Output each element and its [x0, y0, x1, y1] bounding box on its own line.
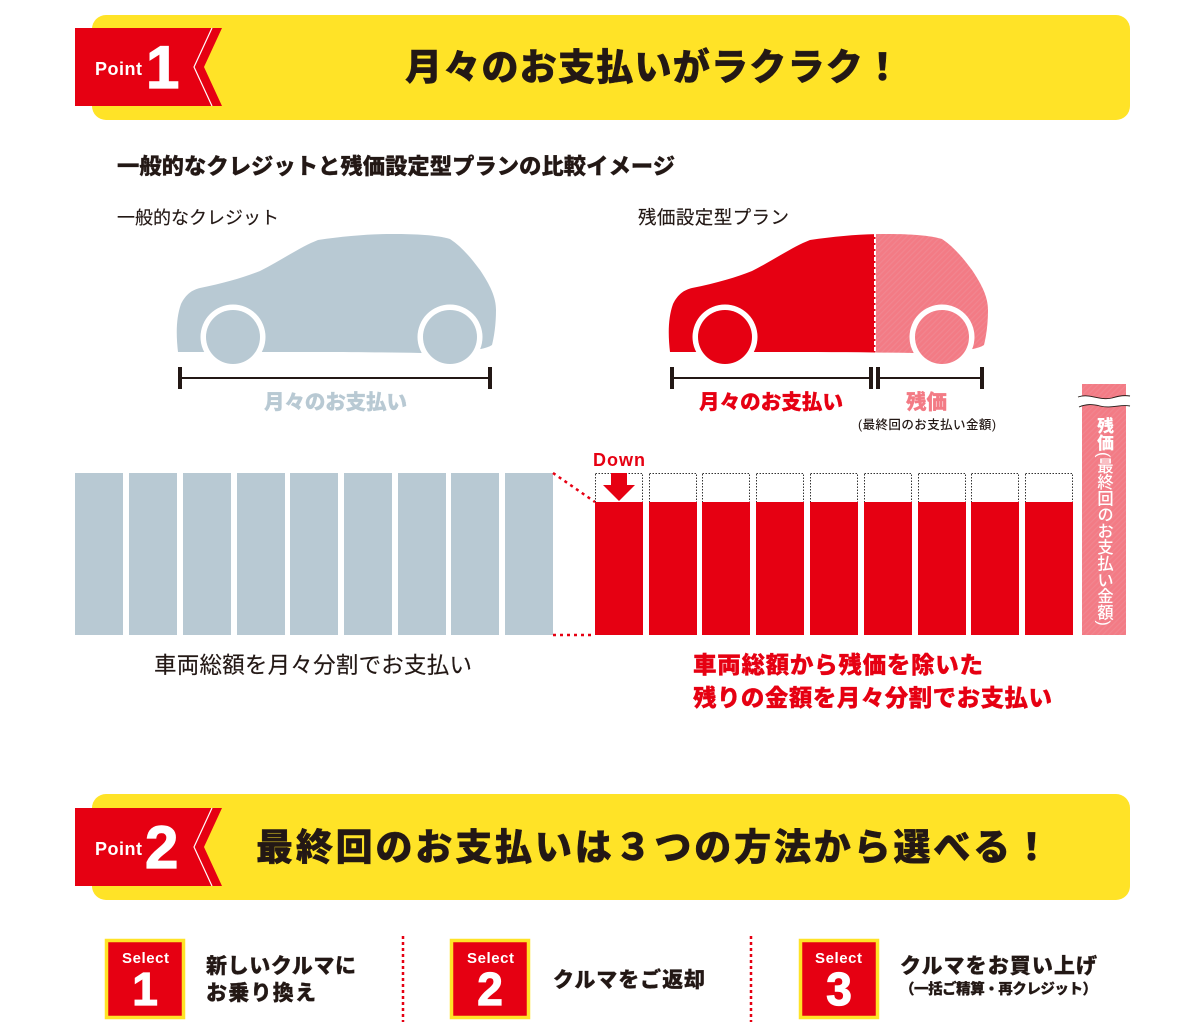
- badge: select 1: 1: [132, 963, 158, 1015]
- car: residual value plan: [669, 233, 988, 370]
- text: option 3: クルマをお買い上げ: [900, 955, 1097, 978]
- text: option 2: クルマをご返却: [553, 968, 705, 992]
- comparison heading: 一般的なクレジットと残価設定型プランの比較イメージ: [117, 153, 675, 179]
- ribbon: point 2: [75, 808, 222, 886]
- label: residual value: 残価: [906, 390, 947, 414]
- label: monthly payment red: 月々のお支払い: [699, 391, 843, 414]
- badge: select 3: [800, 940, 878, 1018]
- badge: select 3: Select: [815, 950, 862, 967]
- divider 1: [402, 936, 404, 1022]
- section: point 1 banner: [75, 15, 1130, 120]
- yellow banner 2: [92, 794, 1130, 900]
- label: down: Down: [593, 450, 645, 470]
- option 1: [106, 940, 356, 1018]
- caption: residual value plan: 残りの金額を月々分割でお支払い: [693, 684, 1052, 711]
- ribbon: point 1: [75, 28, 222, 106]
- caption: general credit: 車両総額を月々分割でお支払い: [154, 653, 472, 678]
- label: general credit: 一般的なクレジット: [117, 208, 279, 228]
- title 2: 最終回のお支払いは３つの方法から選べる！: [256, 827, 1050, 868]
- ribbon: point 1: 1: [146, 34, 179, 101]
- ribbon: point 2: 2: [145, 814, 178, 881]
- badge: select 2: 2: [477, 963, 503, 1015]
- badge: select 1: Select: [122, 950, 169, 967]
- label: monthly payment grey: 月々のお支払い: [264, 391, 407, 414]
- divider 2: [750, 936, 752, 1022]
- text: option 1: 新しいクルマに: [206, 955, 356, 978]
- section: point 2 banner: [75, 794, 1130, 900]
- option 2: [452, 940, 705, 1018]
- badge: select 3: 3: [826, 963, 852, 1015]
- text: option 3: [900, 955, 1097, 998]
- residual column: (最終回のお支払い金額): [1094, 452, 1114, 626]
- arrow: down: [603, 473, 635, 501]
- badge: select 2: [452, 940, 528, 1018]
- text: option 1: お乗り換え: [206, 982, 316, 1005]
- caption: residual value plan: [693, 651, 1052, 711]
- bars: general credit: [75, 473, 553, 635]
- ribbon: point 1: Point: [95, 59, 142, 79]
- title 1: 月々のお支払いがラクラク！: [405, 46, 901, 88]
- ribbon: point 2: Point: [95, 839, 142, 859]
- caption: residual value plan: 車両総額から残価を除いた: [693, 651, 983, 678]
- car: general credit: [177, 234, 496, 370]
- yellow banner 1: [92, 15, 1130, 120]
- badge: select 1: [106, 940, 184, 1018]
- bars: residual value plan: [595, 474, 1073, 635]
- label: final payment note: (最終回のお支払い金額): [858, 417, 996, 432]
- connector dotted lines: [553, 473, 595, 635]
- badge: select 2: Select: [467, 950, 514, 967]
- residual column: 残価: [1094, 416, 1114, 452]
- dimension line: general credit: [178, 367, 492, 389]
- text: option 3: （一括ご精算・再クレジット）: [900, 980, 1097, 998]
- option 3: [800, 940, 1097, 1018]
- label: residual value plan: 残価設定型プラン: [638, 207, 789, 228]
- residual column: [1078, 384, 1130, 635]
- dimension line: residual value plan: [670, 367, 984, 389]
- text: option 1: [206, 955, 356, 1005]
